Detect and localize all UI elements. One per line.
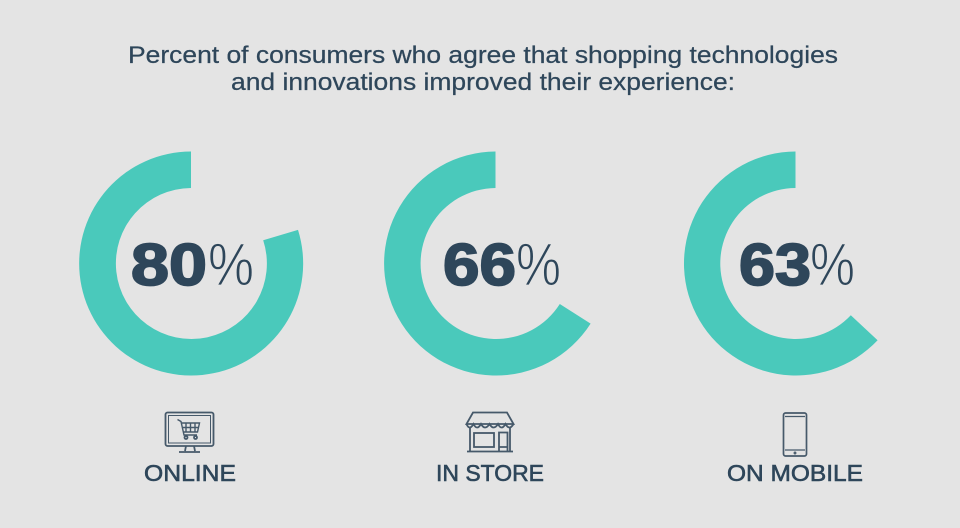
title: and innovations improved their experience:: [231, 69, 735, 96]
panel: on mobile: [684, 152, 878, 486]
value: 63%: [739, 231, 855, 298]
label: on mobile: ON MOBILE: [727, 460, 863, 486]
donut: 63%: [684, 152, 878, 375]
label: online: ONLINE: [144, 460, 236, 486]
value: 66%: %: [516, 231, 561, 298]
label: in store: IN STORE: [436, 460, 544, 486]
value: 80%: %: [208, 231, 254, 298]
donut: 66%: [384, 152, 591, 375]
title: Percent of consumers who agree that shopping technologies: [128, 42, 838, 69]
value: 80%: [131, 231, 254, 298]
icon: storefront: [466, 412, 514, 452]
value: 66%: [443, 231, 561, 298]
value: 63%: 63: [739, 232, 811, 298]
panel: in store: [384, 152, 591, 486]
value: 63%: %: [810, 231, 855, 298]
icon: smartphone: [784, 413, 806, 456]
value: 66%: 66: [443, 232, 516, 298]
donut: 80%: [79, 152, 303, 375]
title: [128, 42, 838, 96]
value: 80%: 80: [131, 232, 207, 298]
icon: monitor with cart: [166, 412, 214, 452]
panel: online: [79, 152, 303, 486]
